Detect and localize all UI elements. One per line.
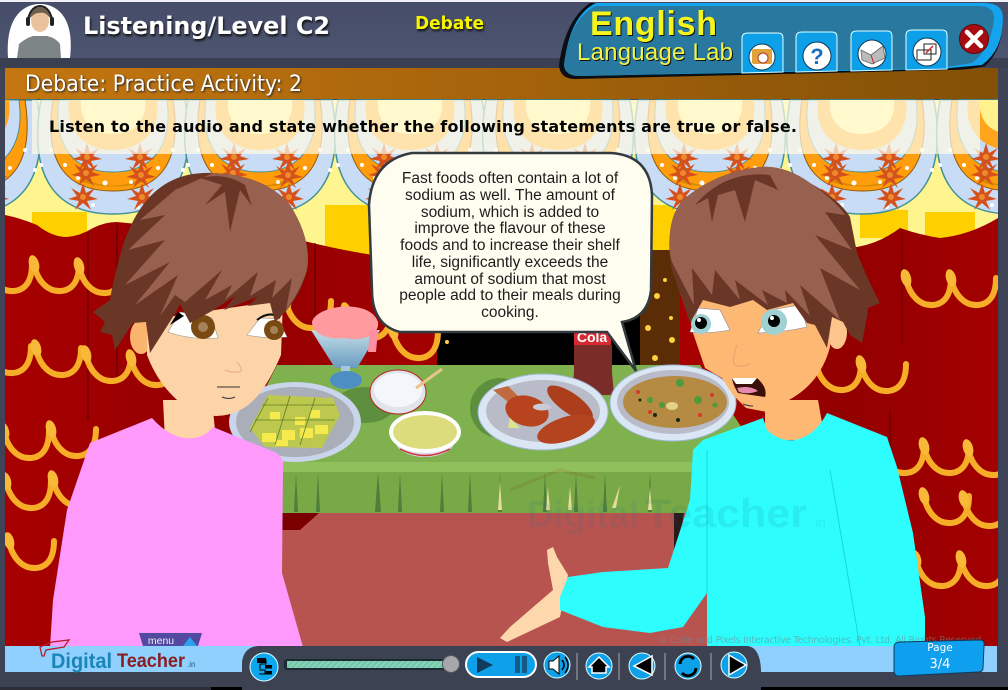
bubble text: improve the flavour of these <box>414 220 606 237</box>
pink shirt <box>50 418 303 647</box>
button: refresh <box>675 653 701 679</box>
plate: fried rice <box>610 365 736 441</box>
cola bottle <box>572 327 614 395</box>
bubble text: Fast foods often contain a lot of <box>402 170 619 187</box>
dotted panel <box>445 250 685 370</box>
bottom bar <box>0 640 1008 690</box>
neck <box>163 400 216 440</box>
menu tab <box>139 633 202 647</box>
valance backdrop <box>5 100 998 270</box>
copyright: © Code and Pixels Interactive Technologies. Pvt. Ltd. All Rights Reserved. <box>658 635 984 646</box>
page indicator: 3/4 <box>930 657 950 672</box>
hand <box>500 547 568 642</box>
button: book <box>851 31 892 71</box>
section label: Debate <box>415 13 484 34</box>
page indicator: Page <box>927 642 953 654</box>
open mouth <box>732 378 766 406</box>
table skirt <box>280 472 710 513</box>
avatar icon <box>8 4 71 58</box>
control panel <box>242 646 761 690</box>
red curtain right <box>680 218 998 646</box>
curtain rope garlands right <box>809 268 1008 586</box>
sundae <box>311 307 380 389</box>
face <box>147 300 283 416</box>
menu tab: menu <box>148 635 174 647</box>
right eye <box>758 305 807 335</box>
shadow <box>335 387 395 423</box>
plate: green squares <box>229 382 361 462</box>
face <box>690 300 830 412</box>
left eye <box>168 312 218 339</box>
title: Listening/Level C2 <box>83 12 330 40</box>
button: home <box>586 653 612 679</box>
button: next <box>721 652 747 678</box>
button: help: ? <box>810 44 824 69</box>
English Language Lab panel <box>559 3 1003 79</box>
button: help <box>796 32 837 72</box>
bubble text: amount of sodium that most <box>414 271 606 288</box>
header bar <box>0 0 1008 68</box>
left eye <box>690 308 730 334</box>
right eye <box>247 314 287 340</box>
hair <box>669 167 880 348</box>
play and pause <box>466 652 536 677</box>
speech bubble <box>369 153 652 371</box>
cyan shirt <box>560 413 925 647</box>
bubble text <box>399 170 621 321</box>
cola label: Cola <box>577 329 607 345</box>
button: sound <box>544 652 570 678</box>
faint watermark: Digital <box>527 494 639 536</box>
progress slider <box>284 656 460 672</box>
button: history folder <box>742 33 783 73</box>
bowl: soup <box>389 411 461 457</box>
table with food <box>225 307 770 513</box>
side margins <box>0 99 5 649</box>
button: back <box>629 653 655 679</box>
page indicator <box>894 640 984 676</box>
floor <box>280 510 710 647</box>
English heading: English <box>590 5 717 43</box>
logo: Digital <box>51 650 112 673</box>
ear <box>130 320 152 354</box>
neck <box>765 400 825 440</box>
bowl: raita <box>370 369 442 414</box>
logo <box>40 640 195 673</box>
close button <box>960 24 988 54</box>
bubble text: foods and to increase their shelf <box>400 237 621 254</box>
back wall center <box>430 300 645 370</box>
hair <box>93 173 308 353</box>
activity title bar <box>5 68 998 99</box>
nose <box>734 345 750 366</box>
bubble text: people add to their meals during <box>399 287 621 304</box>
faint watermark <box>510 470 826 536</box>
bubble text: life, significantly exceeds the <box>412 254 608 271</box>
logo: Teacher <box>117 651 186 672</box>
logo: .in <box>187 660 195 669</box>
activity title: Debate: Practice Activity: 2 <box>25 72 302 97</box>
bubble text: sodium as well. The amount of <box>405 187 616 204</box>
ear <box>827 315 847 349</box>
curtain rope garlands left <box>0 254 438 568</box>
bubble text: cooking. <box>481 304 539 321</box>
plate: tandoori chicken <box>478 374 608 450</box>
character: speaker in cyan <box>500 167 925 647</box>
stage: scene background <box>0 99 1008 649</box>
faded overlay behind instruction <box>32 100 980 154</box>
garland swags <box>0 100 1008 214</box>
faint watermark: Teacher <box>645 492 807 536</box>
nose and mouth <box>217 362 241 398</box>
character: listener in pink <box>50 173 308 647</box>
Language Lab heading: Language Lab <box>577 39 733 66</box>
faint watermark: .in <box>812 515 826 530</box>
red curtain left <box>5 215 437 646</box>
bubble text: sodium, which is added to <box>421 204 599 221</box>
table top <box>225 365 770 470</box>
button: resize <box>906 30 947 70</box>
button: tree <box>250 653 278 681</box>
instruction text: Listen to the audio and state whether the following statements are true or false. <box>49 117 797 136</box>
